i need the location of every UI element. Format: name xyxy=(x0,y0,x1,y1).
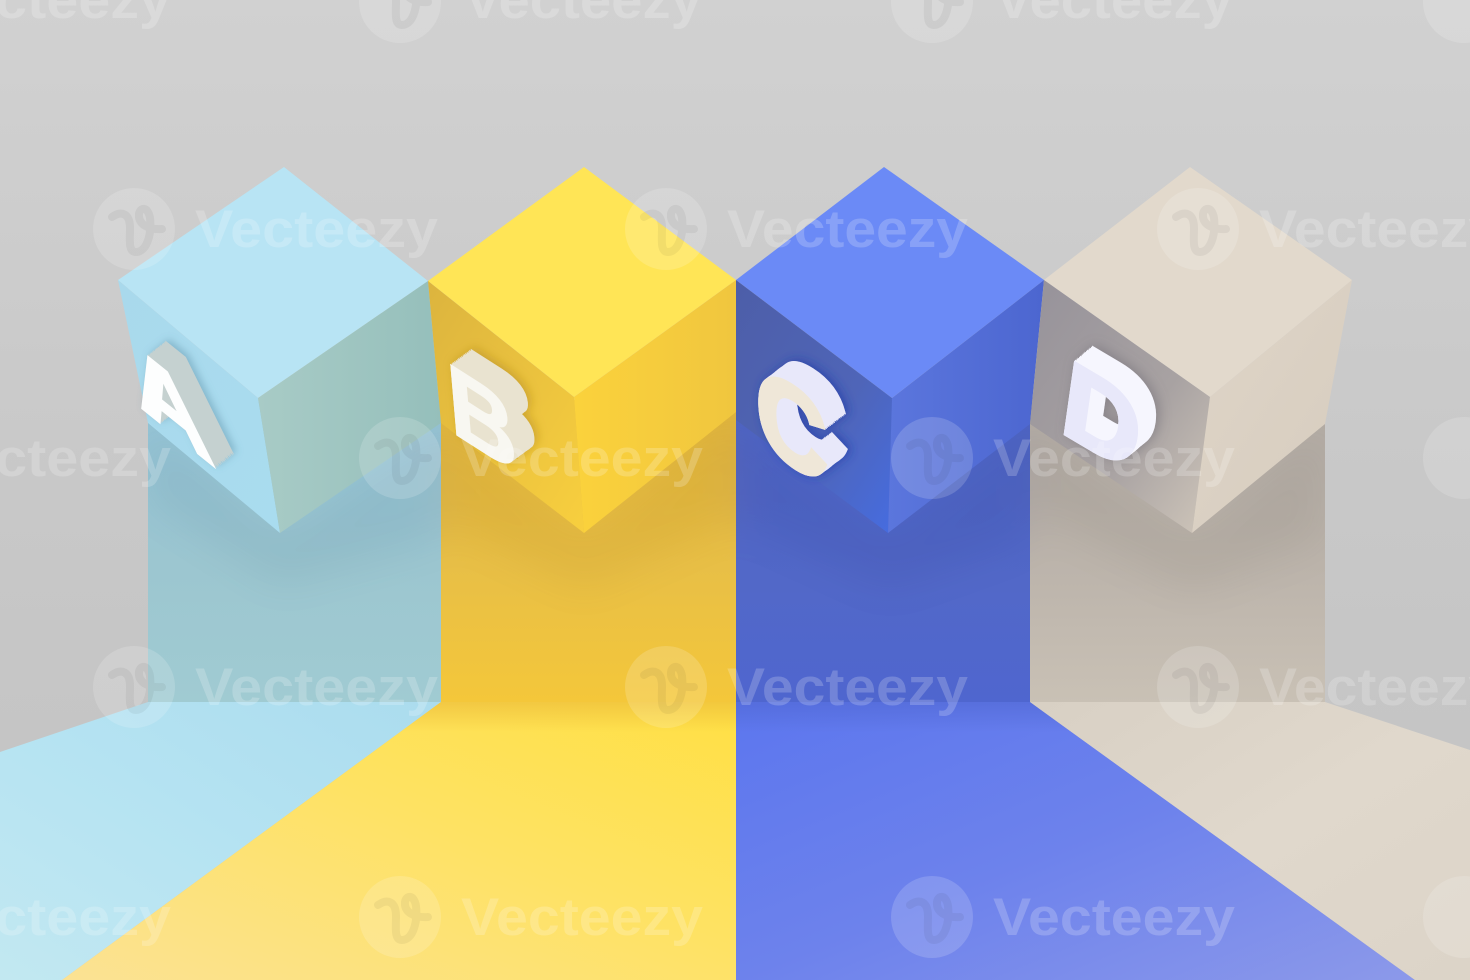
watermark pattern: Vecteezy xyxy=(993,888,1236,947)
panel: cube A xyxy=(118,167,441,533)
letter A: A xyxy=(115,313,222,489)
panel: cube D xyxy=(1030,167,1352,533)
watermark pattern: Vecteezy xyxy=(727,658,969,717)
wall D xyxy=(1030,400,1325,703)
watermark pattern: Vecteezy xyxy=(195,200,439,259)
cube A top face xyxy=(118,167,428,398)
letter D: D xyxy=(1056,338,1148,496)
floor B xyxy=(62,702,736,980)
watermark pattern: Vecteezy xyxy=(195,658,439,717)
cube D right face xyxy=(1192,280,1352,533)
letter B: B xyxy=(443,340,521,496)
cube D top face xyxy=(1044,167,1352,397)
floor B junction glow xyxy=(400,702,736,732)
watermark pattern: Vecteezy xyxy=(727,200,969,259)
watermark pattern: Vecteezy xyxy=(461,888,704,947)
panel: column walls xyxy=(148,400,1325,703)
cube B left face xyxy=(428,281,584,533)
cube B top face xyxy=(428,167,736,397)
panel: cube C xyxy=(736,167,1044,533)
floor A xyxy=(0,702,441,980)
cube C right face xyxy=(888,280,1044,533)
panel: cube B xyxy=(428,167,736,533)
cube C left face xyxy=(736,280,892,533)
wall B xyxy=(441,400,736,703)
wall A xyxy=(148,400,441,703)
wall C xyxy=(736,400,1030,703)
floor C xyxy=(736,702,1415,980)
floor D xyxy=(1030,702,1470,980)
cube C top face xyxy=(736,167,1044,398)
cube B right face xyxy=(574,280,736,533)
letter C: C xyxy=(754,339,829,512)
floor C junction glow xyxy=(736,702,1071,732)
watermark pattern: Vecteezy xyxy=(993,429,1236,488)
cube A left face xyxy=(118,280,280,533)
watermark pattern: Vecteezy xyxy=(461,429,704,488)
cube shadow on walls xyxy=(174,446,1302,560)
cube A right face xyxy=(258,281,441,533)
panel: floor strips xyxy=(0,702,1470,980)
cube D left face xyxy=(1030,280,1210,533)
